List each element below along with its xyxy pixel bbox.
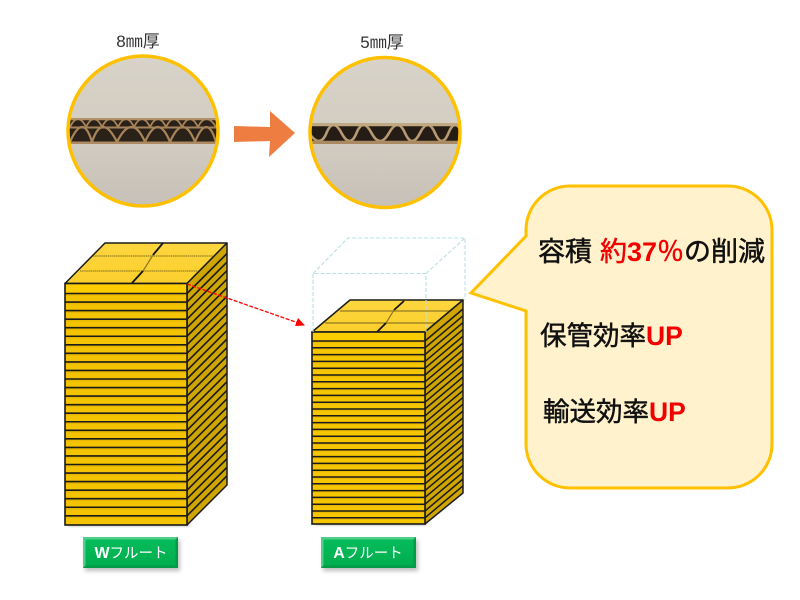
stack: A-flute cardboard stack xyxy=(312,300,463,526)
label: 5mm thickness: 5㎜厚 xyxy=(360,33,404,52)
stack: W-flute cardboard stack xyxy=(65,243,227,527)
arrow: red dashed reduction arrow xyxy=(187,284,305,326)
stack side face xyxy=(187,243,227,525)
callout: benefits speech bubble xyxy=(471,186,772,488)
button: A flute label xyxy=(321,537,418,571)
button: W flute label: Wフルート xyxy=(94,545,168,562)
arrow: orange transition arrow xyxy=(234,111,295,157)
callout text: volume reduction xyxy=(538,237,765,267)
callout text: volume reduction: の削減 xyxy=(684,237,765,267)
callout text: volume reduction: 容積 xyxy=(538,237,592,267)
label: 8mm thickness: 8㎜厚 xyxy=(116,32,160,51)
stack side face xyxy=(425,300,463,524)
stack front face xyxy=(65,284,187,525)
stack front face xyxy=(312,332,425,524)
callout text: volume reduction: 約37％ xyxy=(600,237,684,267)
dashed outline: removed volume xyxy=(313,238,465,332)
photo circle: 8mm W-flute cross-section xyxy=(60,55,226,207)
stack top face xyxy=(65,243,227,284)
callout text: transport efficiency: 輸送効率UP xyxy=(543,397,686,427)
button: A flute label: Aフルート xyxy=(333,545,403,562)
callout text: storage efficiency: 保管効率UP xyxy=(540,321,683,351)
button: W flute label xyxy=(83,537,180,571)
stack top face xyxy=(312,300,463,332)
photo circle: 5mm A-flute cross-section xyxy=(300,56,470,208)
